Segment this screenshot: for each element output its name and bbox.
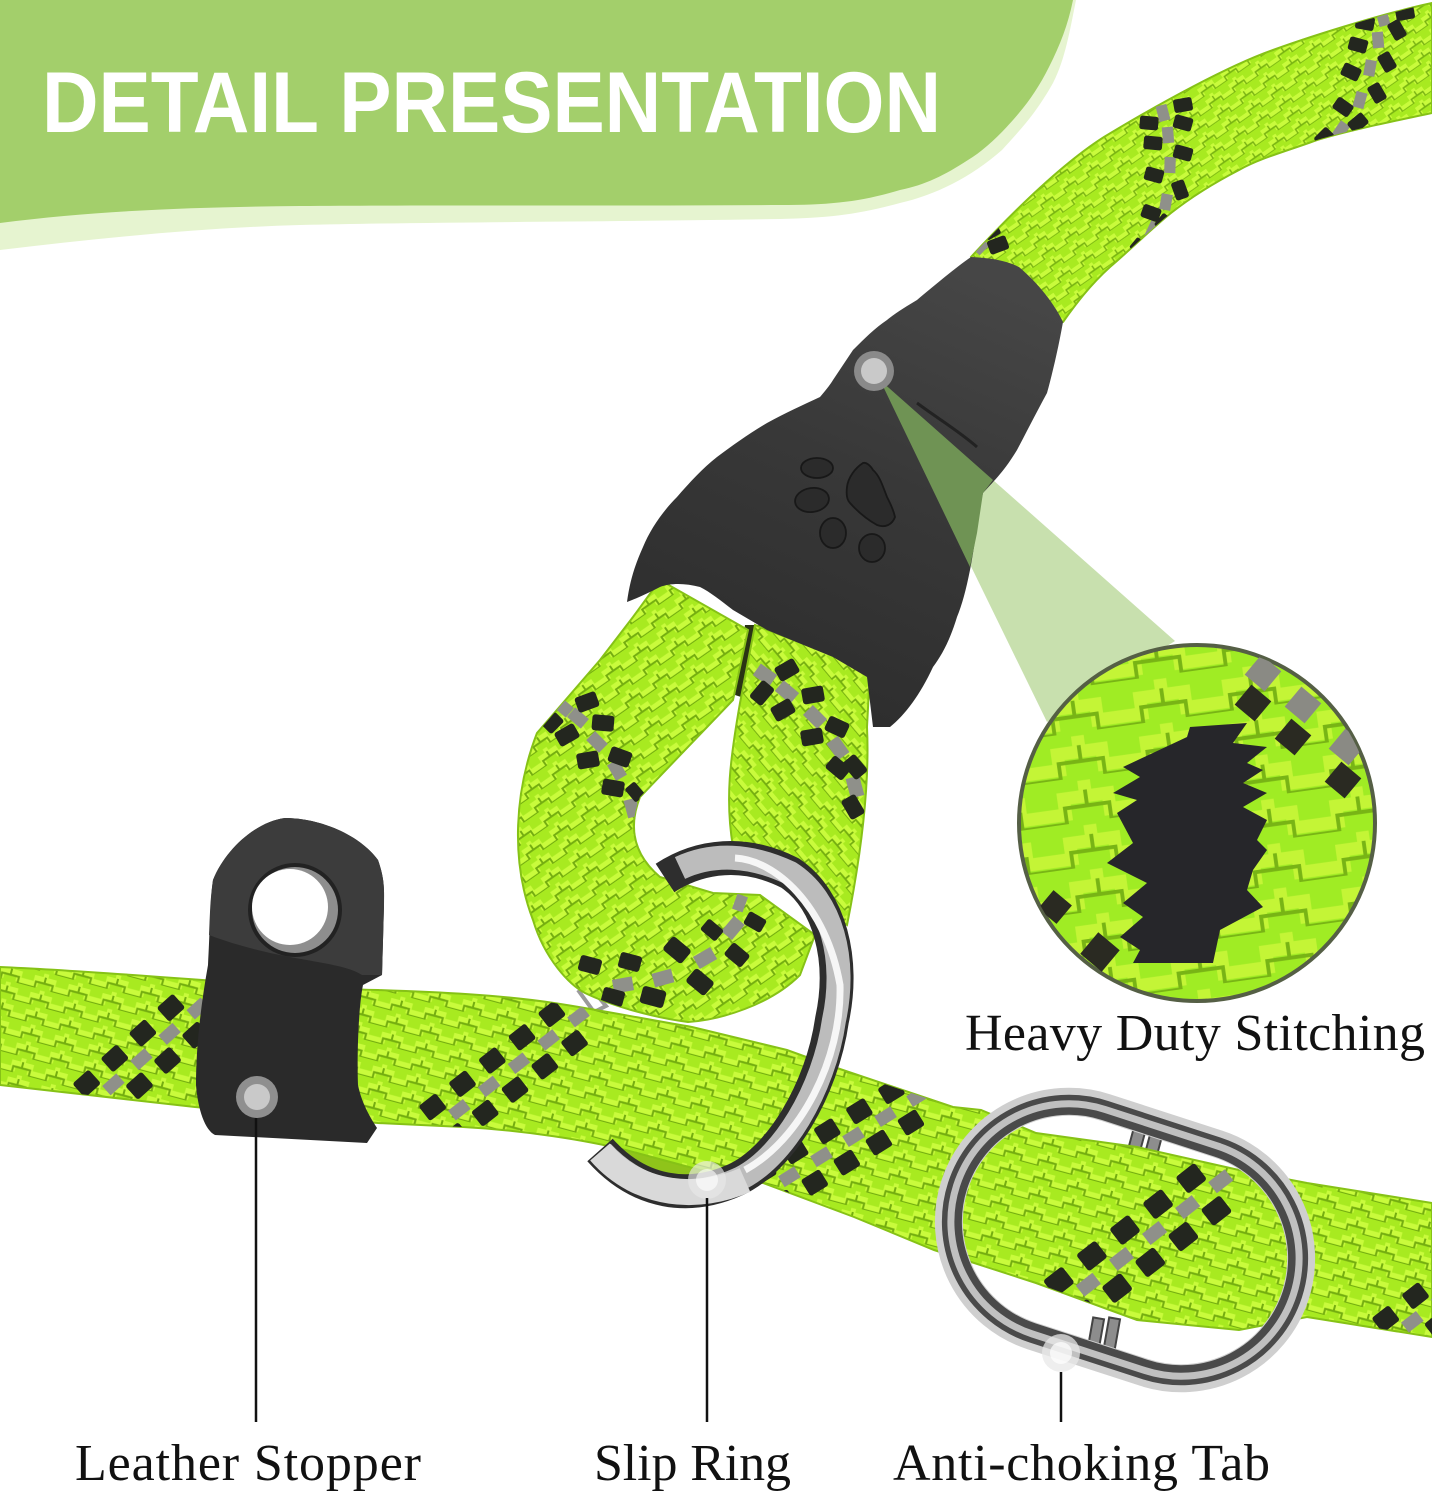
small link between loop and main rope	[578, 990, 606, 1012]
zoom circle: heavy duty stitching	[1019, 645, 1375, 1001]
marker dot: anti-choking tab	[1042, 1334, 1080, 1372]
marker dot: sleeve	[854, 351, 894, 391]
label: heavy duty stitching: Heavy Duty Stitching	[965, 1005, 1425, 1062]
sleeve crease	[917, 403, 977, 447]
callout cone	[880, 380, 1175, 722]
loop rope left strand	[518, 580, 815, 1022]
label: slip ring: Slip Ring	[594, 1435, 791, 1492]
gap between loop strands	[735, 625, 765, 700]
icon: metal snap	[248, 863, 342, 957]
cone overlay on sleeve	[880, 380, 993, 567]
black rubber sleeve	[627, 257, 1063, 727]
main rope	[0, 967, 1432, 1362]
rope section under slip ring	[615, 1145, 745, 1186]
anti-choking tab pins	[1087, 1127, 1164, 1355]
loop rope right strand	[729, 625, 870, 925]
leader lines	[256, 1118, 1061, 1422]
icon: paw print	[793, 458, 895, 562]
title: DETAIL PRESENTATION	[42, 55, 941, 151]
top rope	[971, 3, 1432, 330]
label: anti-choking tab: Anti-choking Tab	[893, 1435, 1270, 1492]
header banner	[0, 0, 1076, 250]
slip ring	[600, 858, 840, 1192]
reflective band 3	[976, 228, 1009, 256]
label: leather stopper: Leather Stopper	[75, 1435, 421, 1492]
reflective marks	[1038, 655, 1365, 972]
leather stopper	[196, 818, 384, 1143]
reflective band 2	[1313, 5, 1415, 148]
black stitching	[1107, 723, 1267, 963]
marker dot: slip ring	[688, 1161, 726, 1199]
marker dot: leather stopper	[236, 1076, 278, 1118]
reflective band 1	[1129, 97, 1194, 253]
anti-choking tab oval ring	[918, 1071, 1332, 1409]
